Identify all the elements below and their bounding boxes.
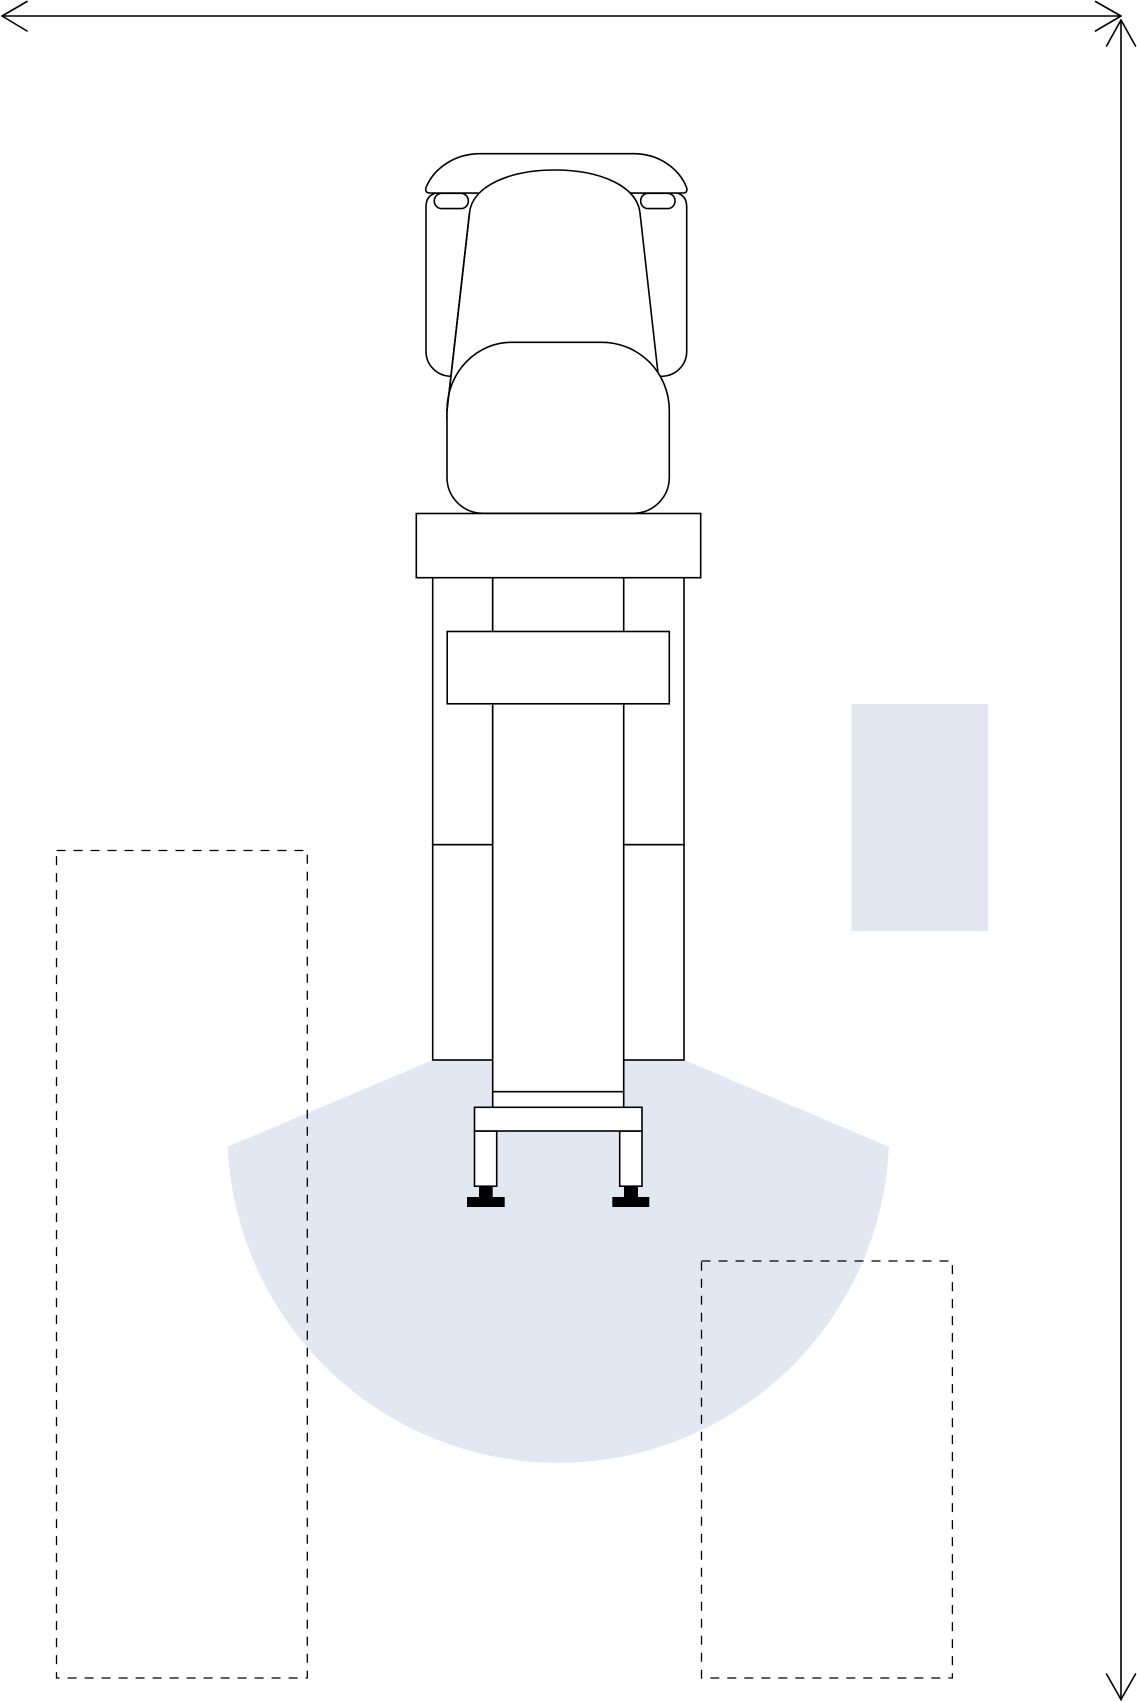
crossbar — [474, 1107, 642, 1131]
column: right upper — [624, 578, 684, 845]
shaded zone: rectangle — [852, 704, 988, 931]
shaded zone: robot reach fan — [228, 1060, 889, 1463]
left leg — [474, 1131, 497, 1186]
arrow: horizontal dimension — [2, 2, 1121, 31]
column: left upper — [433, 578, 493, 845]
robot front housing — [447, 342, 669, 513]
arrow: vertical dimension — [1106, 20, 1136, 1700]
left pill slot — [434, 193, 468, 209]
center column base line — [492, 1091, 624, 1093]
right foot — [612, 1186, 649, 1207]
column: left lower — [433, 845, 493, 1060]
robot arm — [447, 170, 660, 420]
robot machine — [416, 154, 701, 1186]
left foot — [467, 1186, 505, 1207]
arm left edge — [447, 213, 470, 411]
right leg — [620, 1131, 642, 1186]
top plate — [416, 514, 701, 578]
robot top cap — [426, 154, 687, 193]
column: right lower — [624, 845, 684, 1060]
dashed zone: left — [56, 850, 307, 1678]
middle plate — [447, 632, 669, 704]
dashed zone: right — [702, 1261, 952, 1678]
robot rear body — [426, 193, 687, 376]
right pill slot — [641, 193, 675, 209]
center column — [493, 578, 624, 1107]
